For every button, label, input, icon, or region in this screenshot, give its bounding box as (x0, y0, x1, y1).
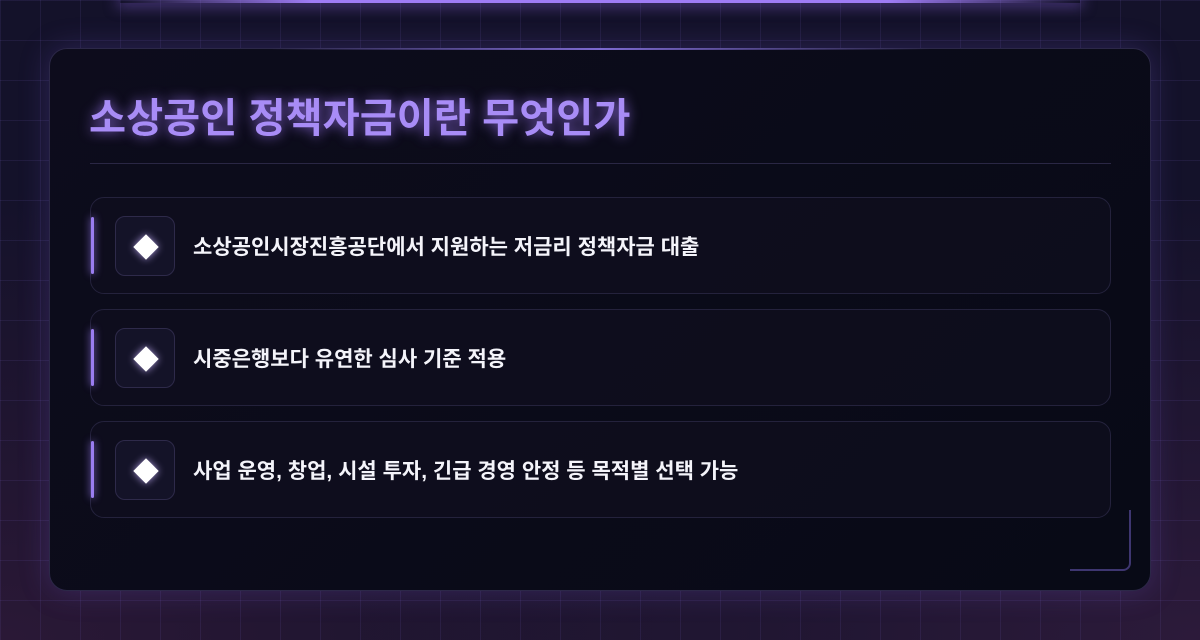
top glow line (120, 0, 1080, 3)
item 3 (90, 421, 1111, 518)
title: 소상공인 정책자금이란 무엇인가 (89, 96, 630, 141)
icon: diamond (115, 216, 175, 276)
icon: diamond (115, 328, 175, 388)
icon: diamond (115, 440, 175, 500)
item 1 (90, 197, 1111, 294)
item 2 (90, 309, 1111, 406)
text 1: 소상공인시장진흥공단에서 지원하는 저금리 정책자금 대출 (193, 236, 699, 259)
corner bracket (1070, 510, 1131, 571)
panel: main card (49, 48, 1151, 591)
text 2: 시중은행보다 유연한 심사 기준 적용 (193, 348, 506, 371)
text 3: 사업 운영, 창업, 시설 투자, 긴급 경영 안정 등 목적별 선택 가능 (193, 460, 738, 483)
